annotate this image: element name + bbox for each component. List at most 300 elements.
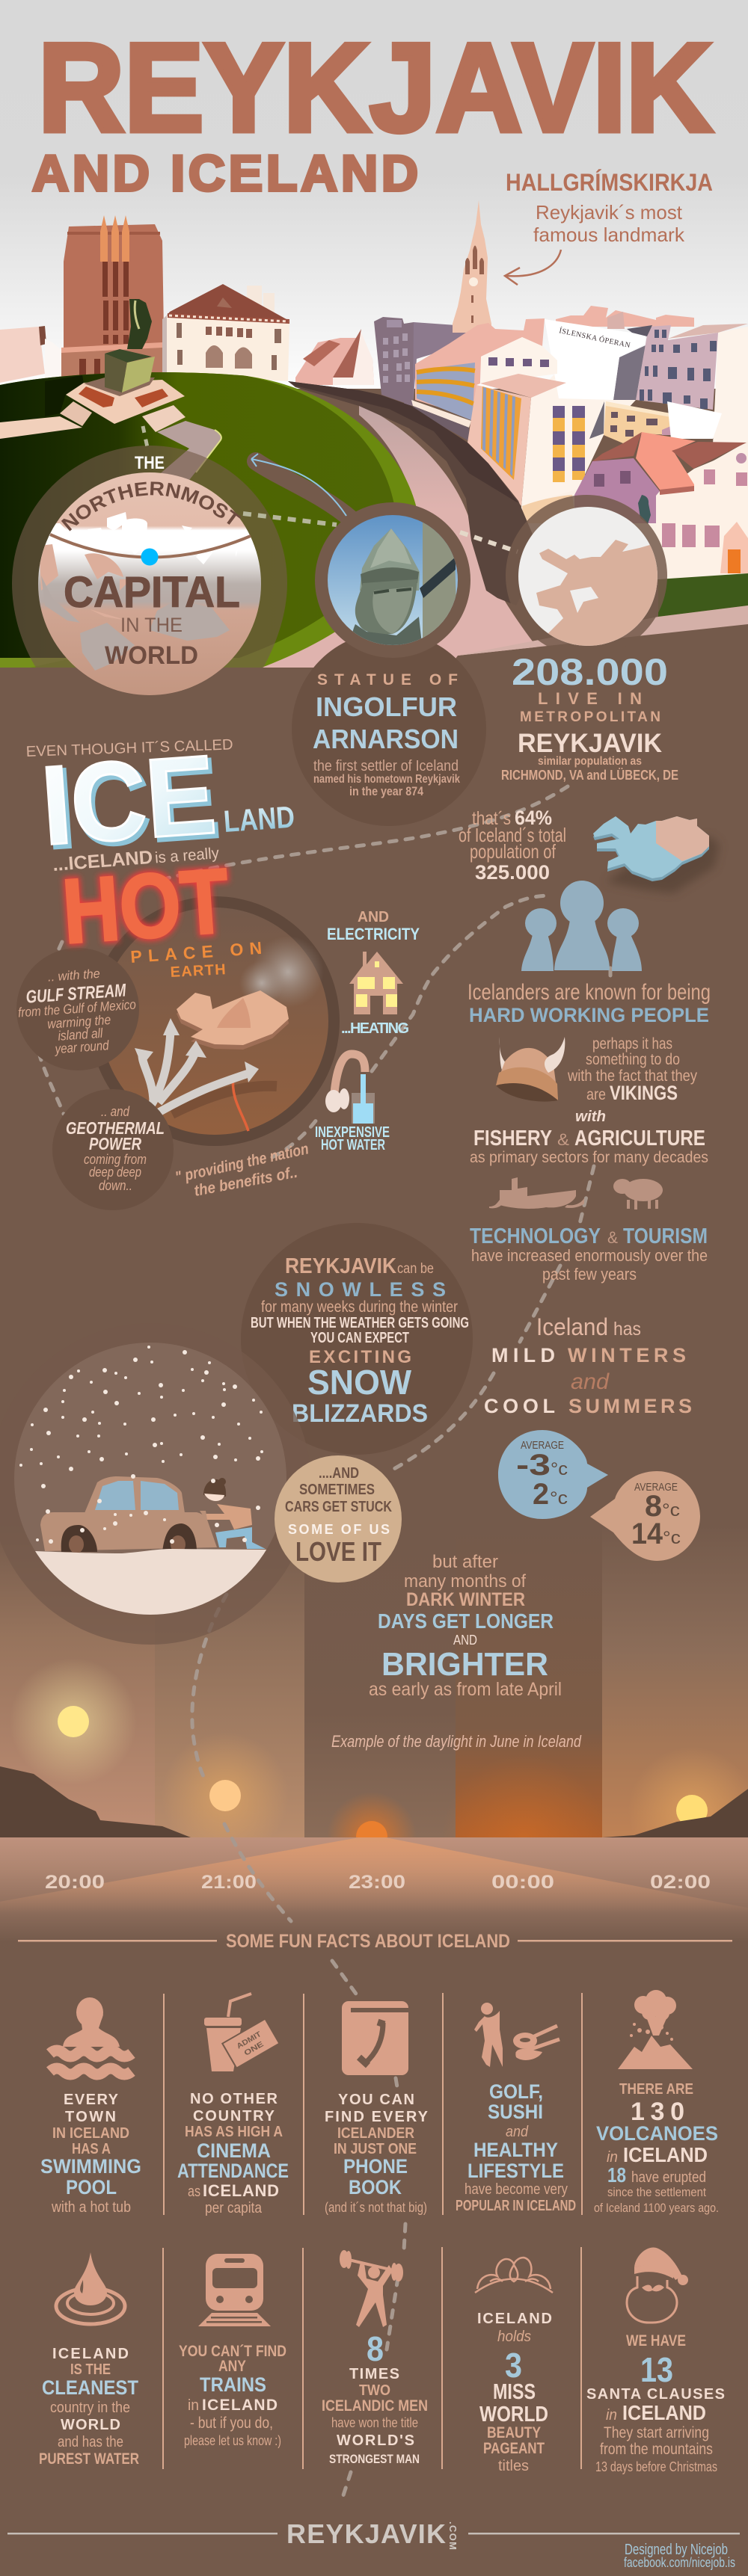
label: in the: IN THE [120, 614, 183, 636]
panel: sectors: past few years [542, 1265, 637, 1284]
fact: golf and sushi: POPULAR IN ICELAND [456, 2198, 576, 2214]
dark text disc [292, 632, 486, 826]
panel: snowy car scene [10, 1343, 299, 1645]
peach plot [522, 495, 576, 523]
panel: snow circle: SNOW [307, 1363, 412, 1402]
icon: tiara [475, 2258, 553, 2293]
car [40, 1476, 217, 1553]
fact: no trains: - but if you do, [190, 2415, 273, 2432]
fact: miss world: holds [497, 2329, 531, 2345]
gulf disc [16, 948, 139, 1070]
live in: LIVE IN [538, 689, 642, 708]
ground band [0, 1837, 748, 1942]
fact: strongest man [322, 2250, 428, 2466]
text: even though: EVEN THOUGH IT´S CALLED [25, 736, 233, 760]
panel: love it bubble: SOME OF US [288, 1522, 390, 1537]
fact: volcanoes: ICELAND [623, 2143, 708, 2166]
fact: golf and sushi: LIFESTYLE [468, 2160, 564, 2182]
panel: Iceland is ice and hot [25, 731, 295, 875]
label: world: WORLD [105, 641, 198, 670]
snowdrift [35, 1549, 266, 1615]
column dividers [162, 1993, 583, 2469]
panel: gulf stream: .. with the [47, 967, 100, 985]
fact: volcanoes: 130 [631, 2098, 684, 2126]
fact: cinema attendance: per capita [205, 2200, 263, 2216]
panel: snow circle: for many weeks during the winter [261, 1298, 458, 1316]
fact: phone book: PHONE [343, 2155, 408, 2178]
panel: longer days: as early as from late April [369, 1679, 562, 1700]
salmon roofs behind opera [556, 306, 694, 327]
title line: and Iceland: AND ICELAND [32, 145, 418, 202]
panel: statue of Ingolfur Arnarson: in the year 874 [349, 784, 423, 798]
fact: cinema attendance: CINEMA [197, 2139, 271, 2162]
cream house [481, 337, 557, 383]
fact: strongest man: WORLD'S [337, 2432, 414, 2449]
fact: santa clauses: in [606, 2407, 617, 2424]
panel: love it bubble: ....AND [319, 1465, 359, 1482]
panel: climate: COOL [484, 1395, 555, 1417]
icon: three people [521, 881, 642, 971]
fact: miss world: titles [498, 2458, 529, 2474]
map share [656, 816, 709, 861]
text: and electricity: AND [358, 909, 389, 925]
panel: population share: 325.000 [475, 861, 550, 884]
icon: golfer and sushi [474, 2003, 560, 2067]
dark road band [288, 381, 533, 606]
snowflakes [19, 1346, 263, 1544]
similar population: similar population as [538, 755, 642, 768]
sun 23:00 [327, 1792, 417, 1882]
fact: strongest man: STRONGEST MAN [329, 2452, 420, 2466]
fact: no trains: in [188, 2397, 199, 2414]
panel: statue of Ingolfur Arnarson [292, 502, 486, 826]
fact: santa clauses: They start arriving [604, 2424, 709, 2441]
text: iceland is a really [52, 842, 220, 875]
panel: geothermal power: coming from [84, 1152, 147, 1167]
inner disc [101, 908, 328, 1135]
panel: summer temperature bubble: °c [663, 1528, 681, 1548]
icon: cup and ticket: ADMIT [236, 2030, 263, 2051]
darkest road band [288, 381, 518, 503]
panel: northernmost capital globe: NORTHERNMOST [61, 481, 241, 531]
label: northernmost on arc [69, 495, 254, 549]
time labels: 00:00 [491, 1872, 554, 1893]
map body [593, 816, 709, 878]
pale dash between statue and city [460, 532, 518, 552]
icon: sheep [613, 1179, 663, 1210]
yellow building [604, 401, 671, 443]
fact: cleanest water: WORLD [61, 2417, 120, 2433]
panel: geothermal power: down.. [99, 1178, 132, 1193]
gulf stream arrows [135, 1018, 259, 1118]
text: Ingolfur: INGOLFUR [316, 691, 457, 722]
fact: cinema attendance: COUNTRY [193, 2108, 275, 2124]
tall striped apartment block [468, 374, 585, 506]
panel: summer temperature bubble [590, 1471, 700, 1561]
pointer arm from statue [256, 461, 352, 520]
fact: swimming pool: SWIMMING [40, 2155, 141, 2178]
fact: no trains: ANY [218, 2358, 246, 2375]
panel: gulf stream [15, 948, 139, 1070]
blue arrow [251, 454, 346, 516]
fact: golf and sushi: and [506, 2124, 529, 2140]
panel: sectors: have increased enormously over the [471, 1246, 708, 1265]
panel: winter temperature bubble: 2 [533, 1478, 549, 1511]
orange striped wall [411, 363, 475, 441]
HOT headline: HOT [59, 849, 232, 963]
panel: climate [484, 1313, 692, 1417]
fact: volcanoes: VOLCANOES [596, 2122, 718, 2145]
panel: longer days: BRIGHTER [381, 1646, 548, 1683]
tower [61, 215, 165, 378]
panel: sectors: AGRICULTURE [574, 1127, 705, 1150]
fact: phone book: YOU CAN [338, 2092, 414, 2108]
icon: swimmer [50, 1997, 132, 2074]
time labels: 20:00 [45, 1872, 105, 1893]
pink road [247, 404, 542, 668]
text: heating: ...HEATING [341, 1020, 409, 1037]
sun 20:00 [10, 1658, 137, 1785]
time labels [45, 1872, 711, 1893]
panel: winter temperature bubble: -3 [516, 1449, 551, 1482]
panel: Reykjavik map and population [501, 495, 678, 783]
panel: winter temperature bubble [498, 1430, 608, 1519]
pedestal [105, 354, 127, 392]
panel: snow circle: BLIZZARDS [292, 1399, 428, 1428]
statue monument [0, 284, 221, 497]
right pale strip [458, 606, 748, 656]
fact: volcanoes: 18 [607, 2163, 626, 2187]
fact: phone book: IN JUST ONE [334, 2141, 417, 2157]
panel: benefits [315, 909, 420, 1153]
panel: snow circle: can be [397, 1261, 434, 1277]
panel: population share [459, 807, 566, 884]
arrow: to church [505, 250, 561, 285]
panel: sectors: & [607, 1228, 618, 1247]
continents [39, 512, 239, 671]
caption: Example of the daylight in June in Iceland [331, 1732, 582, 1751]
text: iceland is a really: is a really [154, 845, 220, 866]
footer logo [7, 2518, 740, 2550]
time labels: 02:00 [650, 1872, 711, 1893]
panel: climate: WINTERS [568, 1344, 686, 1366]
fact: cleanest water: ICELAND [52, 2346, 129, 2362]
map shadow [606, 836, 720, 893]
fact: santa clauses: 13 [640, 2350, 673, 2389]
small red houses [295, 329, 374, 385]
fact: phone book: ICELANDER [337, 2125, 414, 2142]
fact: cleanest water: CLEANEST [42, 2376, 138, 2399]
background: sky [0, 0, 748, 389]
shadow arrows [172, 1086, 277, 1114]
panel: hard working people: VIKINGS [610, 1082, 678, 1104]
icon: viking helmet [496, 1037, 565, 1102]
white building [162, 284, 289, 381]
fact: swimming pool [40, 1997, 141, 2216]
walking path [146, 421, 221, 497]
fact: golf and sushi: HEALTHY [473, 2139, 558, 2161]
word: ICE: ICE [37, 731, 220, 869]
panel: hard working people: HARD WORKING PEOPLE [469, 1004, 709, 1026]
panel: geothermal power: POWER [89, 1134, 141, 1153]
fact: golf and sushi: SUSHI [488, 2101, 543, 2123]
fact: no trains: ICELAND [202, 2397, 278, 2414]
panel: sectors: & [557, 1130, 569, 1149]
fact: phone book: (and it´s not that big) [325, 2200, 427, 2215]
panel: sectors: FISHERY [473, 1127, 552, 1150]
panel: gulf stream: island all [58, 1026, 104, 1044]
salmon roof mass [415, 318, 545, 419]
fact: santa clauses: 13 days before Christmas [595, 2459, 717, 2474]
city buildings [0, 200, 748, 579]
panel: statue of Ingolfur Arnarson: named his hometown Reykjavik [313, 773, 460, 786]
Iceland map shadow [177, 995, 289, 1050]
purple building [374, 317, 478, 406]
HOT headline: HOT [59, 849, 232, 963]
fact: swimming pool: EVERY [64, 2092, 119, 2108]
photo ring [315, 502, 470, 658]
population figure: 208.000 [512, 651, 668, 693]
right mountain [602, 1789, 748, 1837]
panel: climate: Iceland [536, 1313, 608, 1340]
panel: winter temperature bubble: AVERAGE [521, 1439, 564, 1452]
fact: santa clauses: WE HAVE [626, 2332, 686, 2349]
fact: strongest man: ICELANDIC MEN [322, 2397, 428, 2415]
text: inexpensive hot water: INEXPENSIVE [315, 1124, 390, 1141]
fact: swimming pool: POOL [66, 2176, 117, 2198]
panel: geothermal power: .. and [101, 1104, 130, 1119]
icon: Iceland share map [593, 816, 720, 893]
pink roof house [574, 432, 748, 579]
stairs [60, 401, 92, 426]
text: providing the nation [174, 1140, 310, 1200]
reykjavik: REYKJAVIK [518, 729, 662, 758]
panel: gulf stream: GULF STREAM [25, 980, 127, 1008]
brown base [0, 624, 748, 2576]
panel: population share: that´s [472, 808, 511, 829]
panel: longer days: DARK WINTER [406, 1589, 525, 1610]
title line: Reykjavik: REYKJAVIK [38, 17, 712, 158]
fact: cleanest water: and has the [58, 2434, 123, 2450]
landmark callout: Hallgrimskirkja [506, 169, 713, 246]
panel: snow circle: BUT WHEN THE WEATHER GETS GOING [251, 1315, 469, 1331]
fact: golf and sushi [456, 2003, 576, 2214]
panel: gulf stream: from the Gulf of Mexico [17, 997, 136, 1020]
footer logo: REYKJAVIK [286, 2518, 446, 2549]
fact: cleanest water [39, 2252, 139, 2468]
metropolitan: METROPOLITAN [520, 709, 660, 725]
sun 02:00 [628, 1747, 748, 1874]
fact: cinema attendance: HAS AS HIGH A [185, 2124, 283, 2140]
panel: snow circle: SNOWLESS [275, 1278, 446, 1301]
panel: hard working people: are [586, 1086, 606, 1103]
fact: no trains: YOU CAN´T FIND [179, 2343, 286, 2360]
fact: swimming pool: with a hot tub [51, 2199, 131, 2216]
fact: santa clauses: SANTA CLAUSES [586, 2386, 725, 2403]
statue photo [328, 515, 458, 650]
volcanic smoke [239, 936, 324, 1008]
opera house: ÍSLENSKA ÓPERAN [558, 326, 631, 350]
gray wall [589, 401, 604, 439]
icon: train [198, 2254, 271, 2326]
fact: strongest man: have won the title [331, 2415, 418, 2430]
footer logo: .COM [447, 2521, 459, 2550]
text: statue of: STATUE OF [317, 671, 458, 688]
globe halo [12, 446, 287, 668]
time labels: 23:00 [349, 1872, 405, 1893]
panel: hard working people [468, 980, 711, 1104]
fact: cleanest water: PUREST WATER [39, 2450, 139, 2468]
fact: cleanest water: country in the [50, 2400, 130, 2416]
panel: sectors [470, 1109, 708, 1284]
label: capital: CAPITAL [64, 568, 240, 617]
fact: swimming pool: IN ICELAND [52, 2125, 129, 2142]
panel: longer days: many months of [404, 1571, 526, 1591]
fact: miss world [475, 2258, 553, 2474]
panel: love it bubble: SOMETIMES [299, 1482, 375, 1498]
geothermal disc [52, 1089, 174, 1210]
lava line [233, 1076, 248, 1131]
figure [127, 284, 152, 349]
pale dash between globe and statue [243, 514, 337, 525]
glow 00:00 [441, 1755, 606, 1920]
panel: summer temperature bubble: °c [662, 1500, 680, 1520]
fact: strongest man: TWO [359, 2382, 390, 2399]
fact: phone book: BOOK [349, 2176, 402, 2198]
fact: volcanoes: THERE ARE [619, 2081, 693, 2098]
panel: love it bubble: LOVE IT [295, 1536, 381, 1567]
fact: cinema attendance: NO OTHER [190, 2091, 278, 2107]
panel: hard working people: something to do [586, 1051, 680, 1068]
fact: phone book: FIND EVERY [325, 2109, 429, 2125]
fact: no trains: TRAINS [200, 2373, 266, 2396]
panel: longer days: AND [453, 1633, 477, 1648]
faint halo [0, 1323, 311, 1645]
icon: phone book [342, 2001, 408, 2075]
panel: summer temperature bubble: 14 [631, 1517, 663, 1550]
disc [241, 1223, 473, 1455]
credits [624, 2542, 735, 2570]
text: earth: EARTH [170, 961, 226, 981]
panel: climate: MILD [491, 1344, 555, 1366]
text: settler: the first settler of Iceland [313, 758, 459, 774]
fact: strongest man: TIMES [349, 2366, 399, 2382]
volcano streak [217, 998, 251, 1028]
panel: geothermal power: GEOTHERMAL [66, 1118, 165, 1138]
panel: hard working people: perhaps it has [592, 1035, 672, 1053]
right grass strip [658, 573, 748, 617]
fact: miss world: BEAUTY [487, 2424, 541, 2441]
opera gray side [613, 345, 646, 400]
icon: volcano [618, 1990, 693, 2069]
map extrusion [593, 819, 709, 881]
sun 21:00 [162, 1732, 289, 1859]
light beam [0, 1837, 748, 1914]
panel: hard working people: with the fact that they [567, 1067, 697, 1085]
location dot [141, 549, 159, 565]
panel: love it bubble [275, 1455, 402, 1583]
panel: summer temperature bubble: AVERAGE [634, 1481, 678, 1494]
fact: cleanest water: IS THE [70, 2361, 111, 2378]
panel: sectors: TECHNOLOGY [470, 1224, 601, 1248]
text: iceland is a really: ...ICELAND [52, 847, 153, 875]
panel: sectors: with [575, 1109, 606, 1125]
icon: house [349, 952, 403, 1014]
green hill [0, 372, 417, 668]
fact: no trains: please let us know :) [184, 2433, 281, 2448]
rear pink block [627, 324, 748, 445]
panel: longer days [331, 1552, 582, 1751]
Iceland map [177, 990, 289, 1045]
fact: golf and sushi: have become very [465, 2181, 568, 2198]
panel: benefits: HOT WATER [321, 1137, 385, 1153]
panel: climate: and [571, 1369, 610, 1394]
landmark callout: Hallgrimskirkja: HALLGRÍMSKIRKJA [506, 169, 713, 196]
panel: love it bubble: CARS GET STUCK [285, 1499, 392, 1515]
left pink building [0, 326, 63, 383]
panel: population share: of Iceland´s total [459, 824, 566, 846]
panel: geothermal power: deep deep [89, 1165, 141, 1180]
fact: golf and sushi: GOLF, [489, 2080, 543, 2103]
daylight columns [0, 1525, 748, 1942]
panel: geothermal power [52, 1089, 174, 1210]
panel: climate: SUMMERS [568, 1395, 692, 1417]
panel: snow circle [241, 1223, 473, 1455]
panel: population share: 64% [515, 807, 552, 829]
opera house [545, 319, 646, 400]
fact: volcanoes: since the settlement [607, 2185, 706, 2199]
icon: faucet and glass [325, 1054, 375, 1124]
fact: phone book [325, 2001, 429, 2215]
fact: miss world: ICELAND [477, 2311, 552, 2327]
fact: miss world: WORLD [479, 2403, 548, 2426]
panel: winter temperature bubble: °c [551, 1459, 568, 1479]
pale dash [143, 426, 148, 451]
arctic circle line [50, 534, 251, 558]
fact: miss world: 3 [505, 2346, 522, 2385]
fact: strongest man: 8 [367, 2329, 384, 2368]
text: providing the nation: " providing the nation [174, 1140, 310, 1186]
icon: water drop [56, 2252, 125, 2324]
ground behind [516, 441, 748, 579]
panel: gulf stream: year round [53, 1038, 110, 1056]
fact: swimming pool: HAS A [72, 2141, 111, 2157]
landmark callout: Hallgrimskirkja: famous landmark [533, 224, 685, 246]
title [32, 17, 712, 202]
apartment block walls [521, 359, 636, 506]
panel: longer days: but after [432, 1552, 498, 1572]
text: place on: PLACE ON [130, 938, 263, 967]
panel: winter temperature bubble: °c [550, 1488, 568, 1509]
panel: snow circle: YOU CAN EXPECT [310, 1330, 409, 1346]
map land [536, 540, 657, 646]
gray-pink gable [607, 312, 625, 329]
panel: climate: has [613, 1319, 641, 1340]
panel: snow circle: EXCITING [309, 1347, 411, 1367]
icon: Santa [627, 2248, 688, 2323]
panel: sectors: TOURISM [623, 1224, 708, 1248]
white block [667, 401, 722, 439]
word: ICE: ICE [41, 735, 223, 872]
fact: miss world: MISS [493, 2380, 536, 2404]
panel: place on earth [90, 896, 340, 1146]
fact: volcanoes: in [607, 2149, 618, 2166]
fact: volcanoes: have erupted [631, 2169, 706, 2186]
icon: weightlifter [340, 2250, 403, 2327]
fact: volcanoes [594, 1990, 719, 2215]
panel: northernmost capital globe [12, 426, 287, 695]
panel: sectors: as primary sectors for many decades [470, 1149, 708, 1166]
